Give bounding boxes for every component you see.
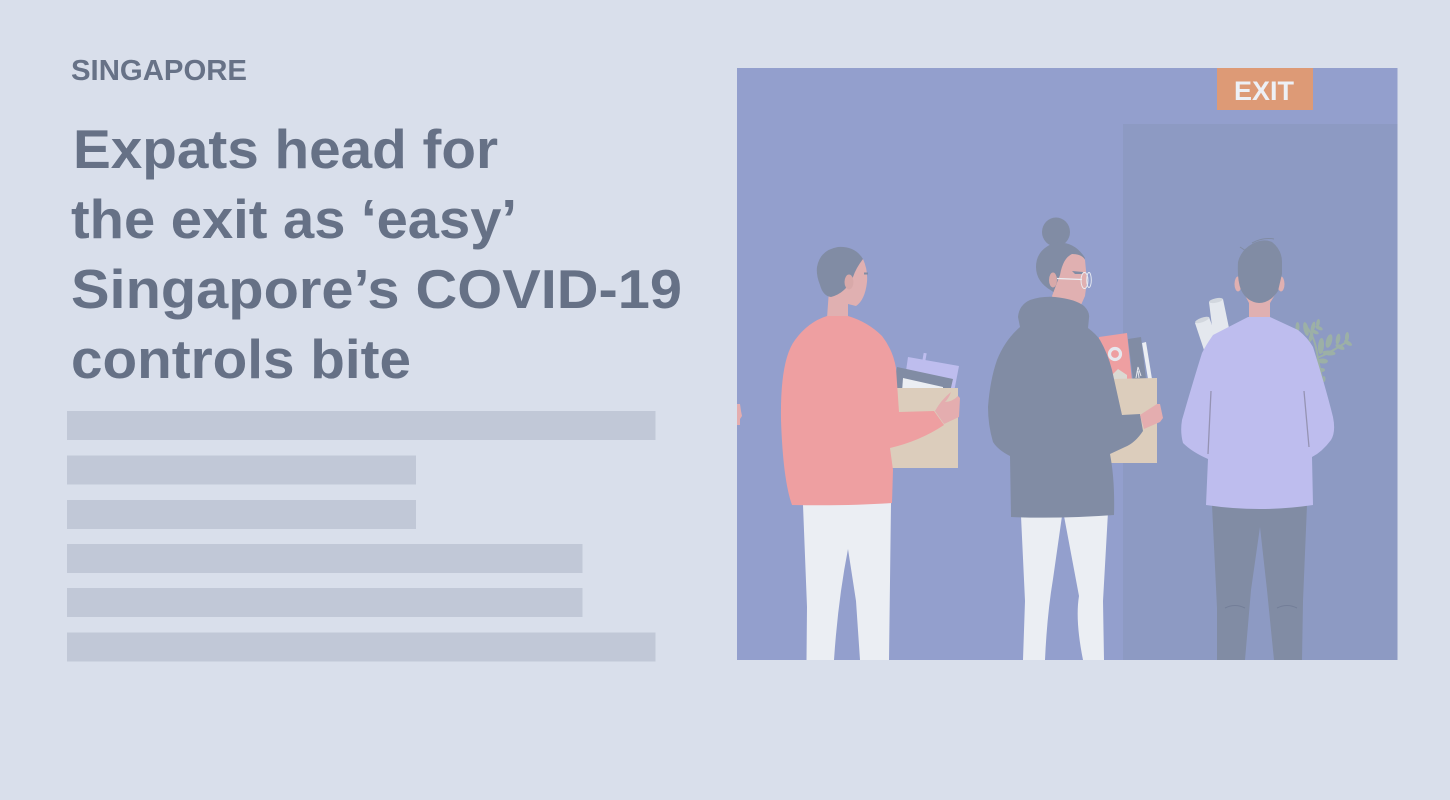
- hair: [817, 247, 863, 297]
- title: Singapore’s COVID-19: [71, 258, 682, 320]
- door: [1123, 124, 1398, 660]
- box: [888, 388, 958, 468]
- hand at the left edge: [737, 404, 742, 425]
- eye: [864, 272, 868, 274]
- glasses: [1057, 272, 1091, 288]
- ear: [844, 274, 854, 290]
- hand: [1140, 404, 1163, 429]
- ear: [1049, 272, 1057, 288]
- hair: [1238, 240, 1282, 303]
- title: controls bite: [71, 328, 411, 390]
- section label: SINGAPORE: [71, 55, 247, 87]
- wall background: [737, 68, 1398, 660]
- title: [71, 118, 682, 390]
- person 2: glasses and hoodie: [988, 218, 1163, 660]
- plant: [1296, 319, 1353, 382]
- sweater: [1181, 317, 1334, 509]
- folders in box: [1099, 333, 1152, 380]
- box contents: [892, 353, 959, 392]
- hand: [935, 392, 960, 424]
- exit sign: [1217, 68, 1313, 110]
- exit sign: EXIT: [1234, 76, 1295, 106]
- hoodie: [988, 297, 1143, 518]
- sweater: [781, 316, 944, 505]
- legs: [803, 503, 891, 660]
- hair wisps: [1240, 238, 1274, 251]
- knee creases: [1225, 606, 1297, 608]
- title: the exit as ‘easy’: [71, 188, 517, 250]
- face and neck: [1052, 254, 1087, 312]
- trousers: [1212, 505, 1307, 660]
- placeholder body text bars: [67, 411, 656, 662]
- box: [1108, 378, 1157, 463]
- rolled papers: [1194, 297, 1229, 350]
- ears: [1234, 276, 1242, 292]
- hair: [1036, 243, 1085, 300]
- eyebrow: [1072, 271, 1083, 274]
- sweater seams: [1208, 391, 1309, 454]
- neck and face: [827, 250, 867, 318]
- illustration panel: [737, 68, 1398, 660]
- person 3: rolled papers and lilac sweater: [1181, 238, 1334, 660]
- person 1: carrying a box: [781, 247, 960, 660]
- neck: [1241, 288, 1279, 320]
- title: Expats head for: [73, 118, 498, 180]
- legs: [1021, 512, 1108, 660]
- bun: [1042, 218, 1070, 246]
